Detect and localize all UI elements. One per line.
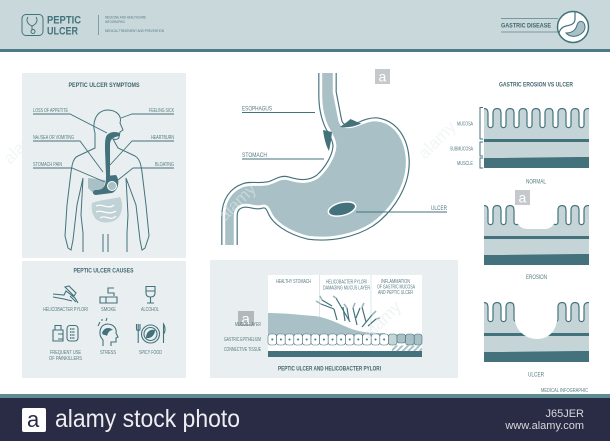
- bacteria: [316, 296, 380, 327]
- footer brand text: alamy stock photo: [55, 405, 240, 433]
- label: heartburn: [110, 135, 174, 165]
- icon: stressed head: [98, 318, 118, 346]
- label: frequent use of painkillers: FREQUENT USE: [50, 350, 81, 356]
- footer band: [0, 394, 610, 441]
- column label: damaging mucus layer: HELICOBACTER PYLORI: [326, 280, 367, 286]
- title: Peptic Ulcer: ULCER: [47, 26, 78, 38]
- watermark text: alamy: [0, 122, 45, 168]
- label: loss of appetite: LOSS OF APPETITE: [33, 108, 68, 114]
- label: feeling sick: FEELING SICK: [149, 108, 174, 114]
- footer logo: a: [27, 407, 40, 432]
- title: Peptic Ulcer: PEPTIC: [47, 14, 81, 26]
- header subtitle: INFOGRAPHIC: [105, 19, 125, 24]
- footer logo: [22, 407, 46, 432]
- column label: inflammation: OF GASTRIC MUCOSA: [377, 284, 415, 290]
- footer image id: www.alamy.com: [504, 420, 584, 432]
- icon: cigarette: [100, 288, 117, 303]
- footer image id: J65JER: [545, 408, 584, 420]
- label: smoke: SMOKE: [101, 307, 116, 313]
- watermark text: alamy: [359, 297, 405, 343]
- label: esophagus: ESOPHAGUS: [242, 106, 272, 112]
- header subtitle: MEDICINE AND HEALTHCARE: [105, 14, 146, 20]
- label: loss of appetite: [33, 108, 107, 133]
- diagram: erosion: [484, 202, 589, 265]
- icon: wine glass: [146, 286, 155, 303]
- label: ulcer: [356, 206, 448, 212]
- body figure: [65, 110, 149, 252]
- icon: painkillers: [53, 326, 78, 341]
- header subtitle: [98, 14, 164, 35]
- label: stomach pain: STOMACH PAIN: [33, 162, 62, 168]
- watermark text: alamy: [214, 179, 260, 225]
- label: connective tissue: CONNECTIVE TISSUE: [224, 347, 261, 353]
- label: stomach: [242, 153, 324, 159]
- label: helicobacter pylori: HELICOBACTER PYLORI: [43, 307, 88, 313]
- watermark tile: [238, 311, 254, 328]
- footer image id: [504, 408, 584, 432]
- heading: symptoms: PEPTIC ULCER SYMPTOMS: [68, 82, 140, 89]
- label: frequent use of painkillers: OF PAINKILLERS: [49, 356, 82, 362]
- label: bloating: [118, 162, 174, 180]
- label: ulcer stage: ULCER: [528, 372, 545, 378]
- stomach illustration: [221, 73, 410, 245]
- brackets and layer labels: [450, 108, 483, 168]
- ulcer: [328, 201, 356, 217]
- brackets and layer labels: MUSCLE: [457, 161, 473, 167]
- label: erosion: EROSION: [526, 275, 547, 281]
- heading: causes: PEPTIC ULCER CAUSES: [74, 268, 134, 274]
- panel: causes: [22, 261, 186, 378]
- header badge: gastric disease: [501, 12, 588, 42]
- watermark text: [0, 117, 460, 343]
- watermark tiles: [375, 68, 530, 206]
- header band: [0, 0, 610, 52]
- brackets and layer labels: SUBMUCOSA: [450, 146, 473, 152]
- label: bloating: BLOATING: [155, 162, 174, 168]
- column label: damaging mucus layer: DAMAGING MUCUS LAYER: [323, 286, 370, 292]
- heading: peptic ulcer and helicobacter pylori: PEPTIC ULCER AND HELICOBACTER PYLORI: [278, 366, 381, 372]
- label: stomach: STOMACH: [242, 153, 267, 159]
- heading: gastric erosion vs ulcer: GASTRIC EROSION VS ULCER: [499, 82, 573, 88]
- watermark tile: a: [242, 311, 250, 328]
- column label: inflammation: INFLAMMATION: [381, 279, 410, 285]
- label: heartburn: HEARTBURN: [151, 135, 174, 141]
- label: spicy food: SPICY FOOD: [139, 350, 162, 356]
- label: nausea or vomiting: [33, 135, 103, 172]
- label: stomach pain: [33, 162, 105, 182]
- header subtitle: MEDICAL TREATMENT AND PREVENTION: [105, 28, 164, 33]
- label: normal: NORMAL: [526, 180, 547, 186]
- label: frequent use of painkillers: [49, 350, 82, 362]
- mucus layer: [268, 313, 385, 336]
- label: nausea or vomiting: NAUSEA OR VOMITING: [33, 135, 74, 141]
- title: Peptic Ulcer: [47, 14, 81, 38]
- epithelium cells: [268, 334, 422, 345]
- connective tissue bar: [268, 351, 422, 357]
- stomach wall dark patches: [323, 119, 362, 151]
- icon: stethoscope logo: [22, 14, 43, 36]
- brackets and layer labels: MUCOSA: [457, 122, 473, 128]
- icon: plate and cutlery: [136, 324, 165, 343]
- label: alcohol: ALCOHOL: [141, 307, 159, 313]
- diagram: normal tissue: [484, 107, 589, 168]
- label: feeling sick: [121, 108, 174, 118]
- label: ulcer: ULCER: [431, 206, 448, 212]
- watermark tiles: a: [518, 190, 526, 206]
- header badge: gastric disease: GASTRIC DISEASE: [501, 24, 551, 30]
- label: gastric epithelium: GASTRIC EPITHELIUM: [224, 337, 261, 343]
- column label: inflammation: AND PEPTIC ULCER: [378, 290, 413, 296]
- icon: helicobacter: [53, 286, 78, 303]
- inflamed tissue hatch: [392, 346, 422, 351]
- panel: symptoms: [22, 73, 186, 258]
- watermark tiles: a: [378, 68, 386, 84]
- diagram: ulcer: [484, 299, 589, 362]
- label: medical infographic: MEDICAL INFOGRAPHIC: [541, 388, 588, 394]
- label: stress: STRESS: [100, 350, 116, 356]
- column label: inflammation: [377, 279, 415, 296]
- column label: healthy stomach: HEALTHY STOMACH: [276, 279, 311, 285]
- label: mucus layer: MUCUS LAYER: [235, 322, 261, 328]
- column label: damaging mucus layer: [323, 280, 370, 292]
- watermark text: alamy: [414, 117, 460, 163]
- panel: helicobacter pylori: [210, 260, 458, 378]
- label: esophagus: [242, 106, 315, 112]
